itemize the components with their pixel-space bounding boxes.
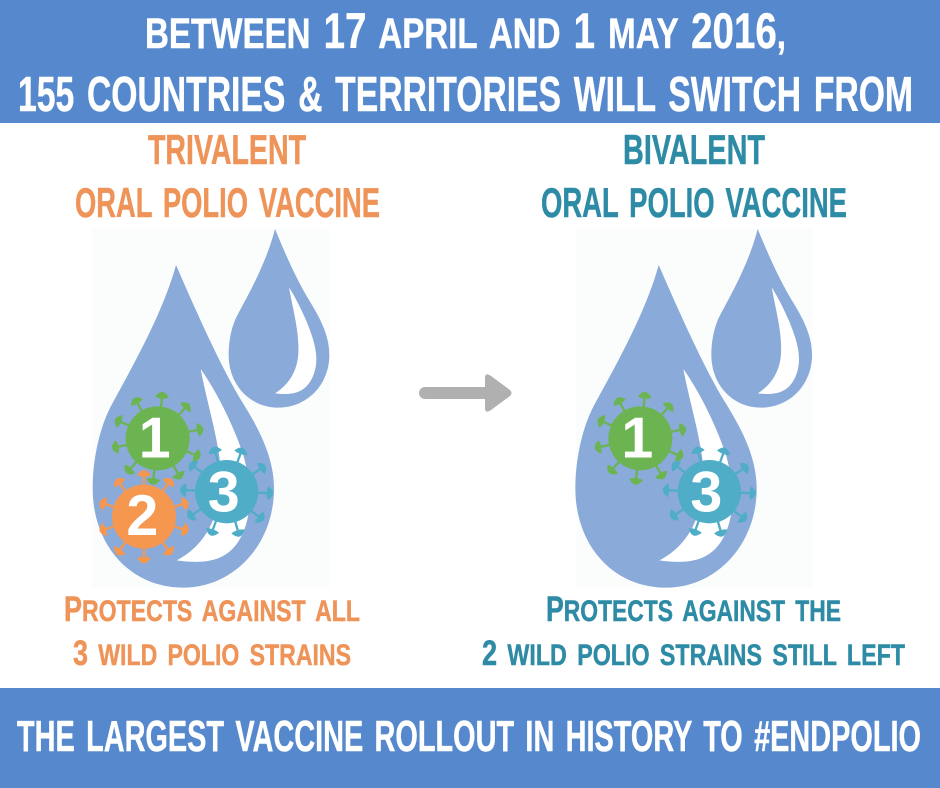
- heading: bivalent: [541, 126, 847, 226]
- illustration: bivalent drops with viruses 1 3: [575, 228, 813, 588]
- headline line 1: BETWEEN 17 APRIL AND 1 MAY 2016,: [145, 3, 786, 59]
- heading: trivalent: TRIVALENT: [148, 126, 306, 173]
- virus 1: 1: [139, 407, 171, 471]
- virus 1: 1: [621, 407, 653, 471]
- virus 3: 3: [690, 461, 722, 525]
- virus 2: [97, 470, 191, 563]
- virus 1: [106, 387, 209, 490]
- caption: bivalent: [482, 590, 905, 673]
- virus 3: [167, 432, 286, 551]
- caption: trivalent: [64, 590, 360, 673]
- header banner: [0, 0, 940, 123]
- caption: trivalent: 3 WILD POLIO STRAINS: [73, 634, 351, 673]
- heading: bivalent: BIVALENT: [623, 126, 765, 173]
- caption: trivalent: PROTECTS AGAINST ALL: [64, 590, 360, 629]
- heading: trivalent: ORAL POLIO VACCINE: [75, 179, 380, 226]
- footer banner: [0, 688, 940, 788]
- virus 3: [650, 432, 769, 551]
- arrow: [419, 374, 512, 412]
- illustration: trivalent drops with viruses 1 2 3: [93, 228, 330, 588]
- heading: trivalent: [75, 126, 380, 226]
- virus 1: [589, 387, 692, 490]
- virus 2: 2: [126, 484, 158, 548]
- virus 3: 3: [208, 461, 240, 525]
- caption: bivalent: PROTECTS AGAINST THE: [546, 590, 841, 629]
